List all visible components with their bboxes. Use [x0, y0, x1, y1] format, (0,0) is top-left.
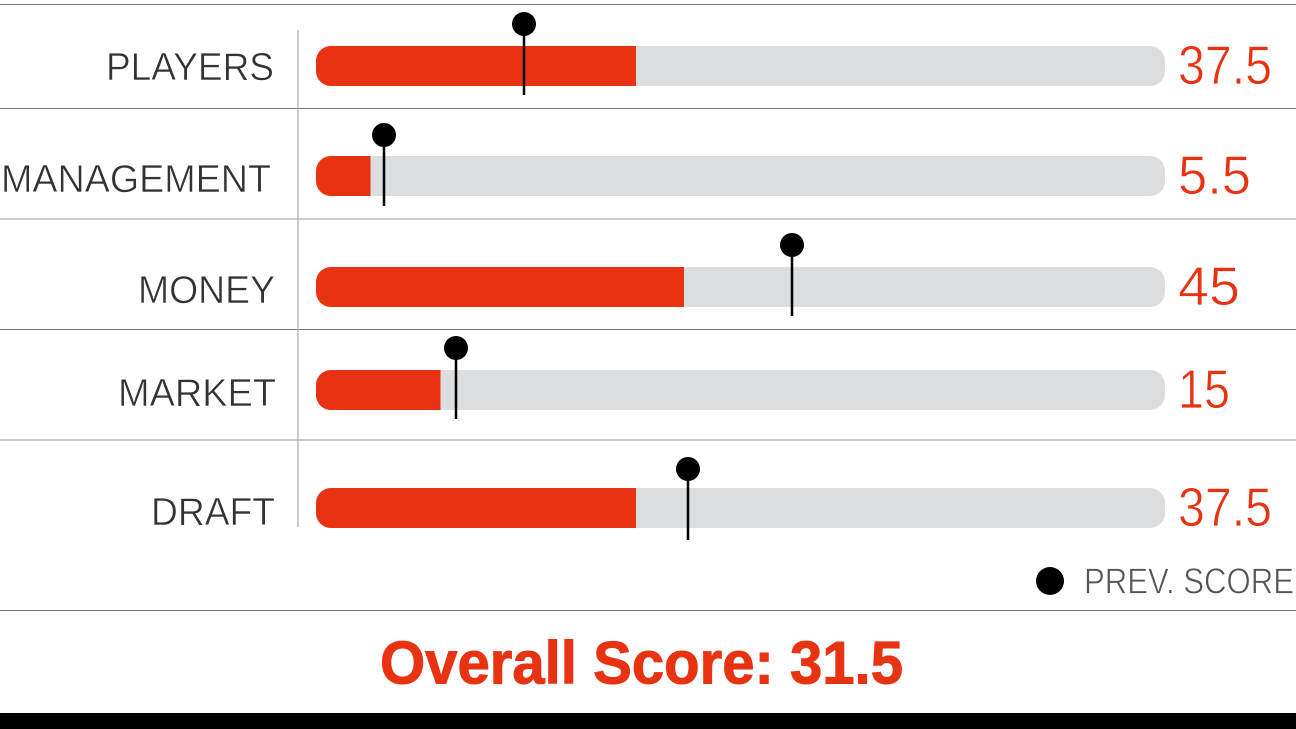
bar value: management — [316, 156, 370, 196]
label: players: PLAYERS — [106, 46, 274, 89]
bar track: draft — [316, 488, 1165, 528]
score: market: 15 — [1178, 358, 1230, 420]
row: players — [106, 12, 1272, 96]
bar value: market — [316, 370, 440, 410]
bar value: draft — [316, 488, 636, 528]
row: money — [138, 233, 1240, 317]
bar track: players — [316, 46, 1165, 86]
row: management — [1, 123, 1251, 206]
label: draft: DRAFT — [151, 491, 275, 534]
legend: previous score — [1036, 560, 1294, 602]
score: draft: 37.5 — [1178, 476, 1272, 538]
legend dot — [1036, 567, 1064, 595]
overall score: Overall Score: 31.5 — [380, 630, 903, 696]
previous score pin: money — [780, 233, 804, 316]
score: management: 5.5 — [1178, 144, 1251, 206]
bar value: players — [316, 46, 636, 86]
bottom black band — [0, 713, 1296, 729]
score: players: 37.5 — [1178, 34, 1272, 96]
row: draft — [151, 457, 1272, 540]
row: market — [118, 336, 1230, 420]
score: money: 45 — [1178, 255, 1240, 317]
previous score pin: draft — [676, 457, 700, 540]
bar track: market — [316, 370, 1165, 410]
label: market: MARKET — [118, 372, 276, 415]
previous score pin: players — [512, 12, 536, 95]
label: money: MONEY — [138, 269, 275, 312]
bar track: money — [316, 267, 1165, 307]
previous score pin: management — [372, 123, 396, 206]
bar track: management — [316, 156, 1165, 196]
bar value: money — [316, 267, 684, 307]
previous score pin: market — [444, 336, 468, 419]
label: management: MANAGEMENT — [1, 158, 271, 201]
